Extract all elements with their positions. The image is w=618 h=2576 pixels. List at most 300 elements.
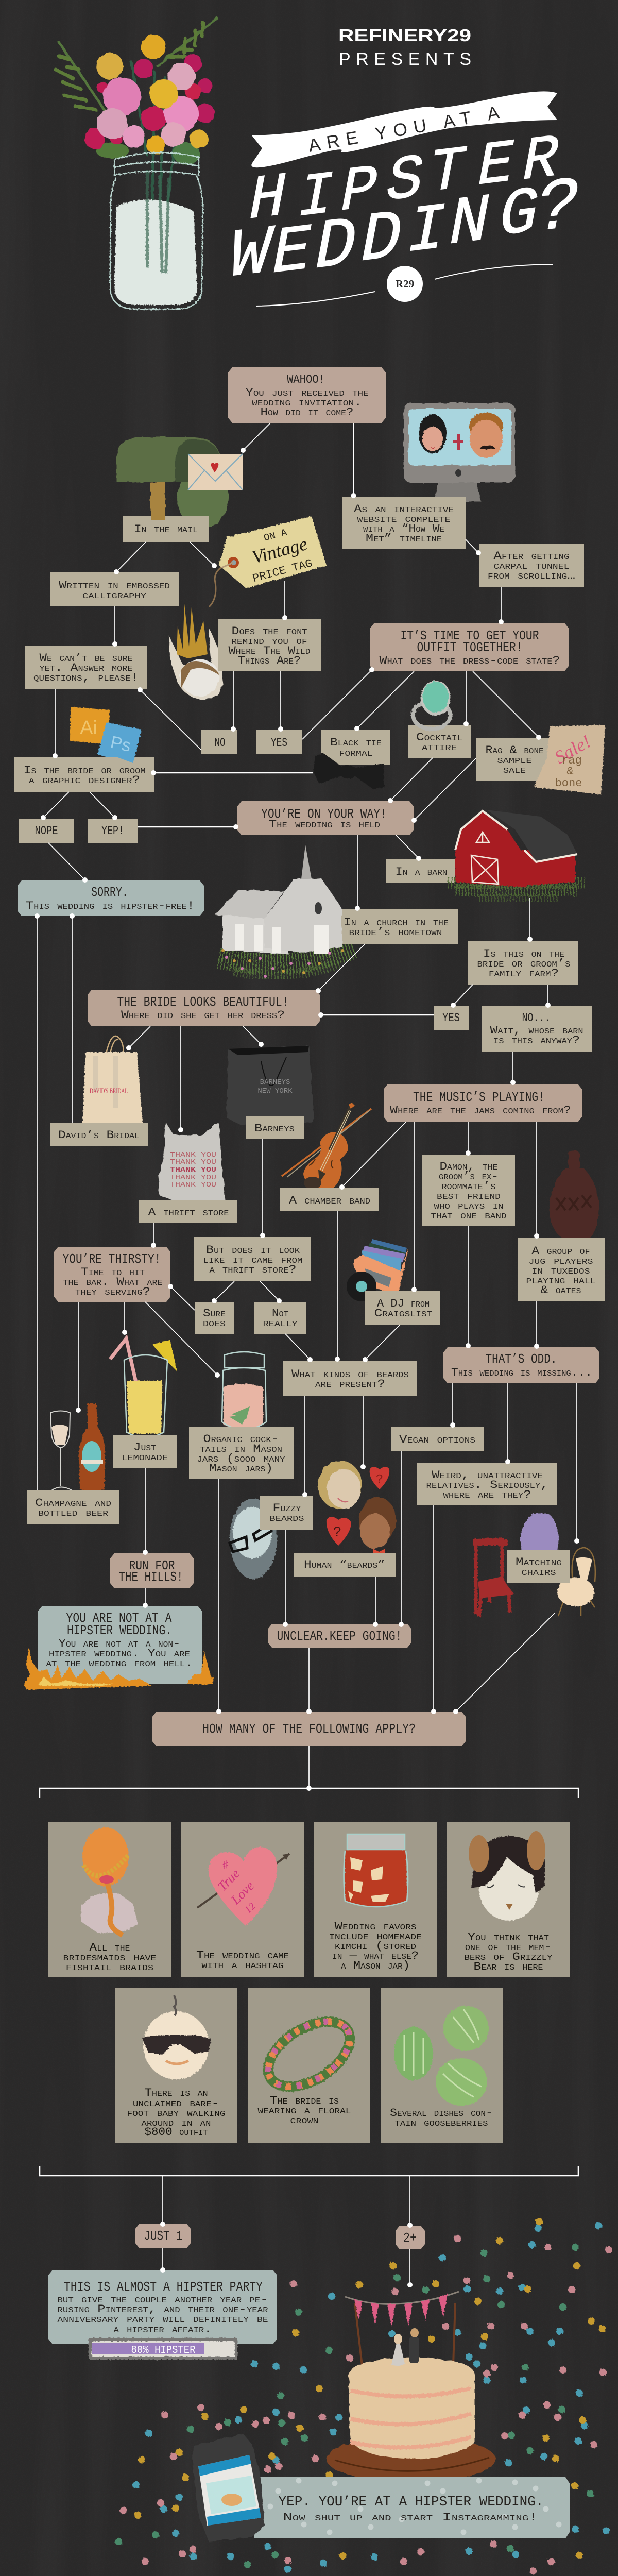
box: organic cocktails [189,1427,294,1479]
box: we can't be sure: yet. Answer more [39,662,133,674]
card: homemade kimchi: include homemade [329,1930,422,1943]
card: fishtail braids: fishtail braids [66,1961,153,1974]
icon: vintage price tag: ON A [263,527,288,544]
box: just 1 [135,2224,191,2248]
brand: refinery29 presents: REFINERY29 [338,26,471,45]
box: how many of the following apply [152,1712,466,1746]
arrow: rag and bone to on your way [411,758,476,823]
box: damon: that one band [431,1209,507,1222]
arrow: designer to yep [90,792,117,820]
box: after getting carpal tunnel: After getting [493,550,570,563]
arrow: human to unclear [373,1577,378,1627]
card: grizzly bear [447,1822,570,1977]
box: organic cocktails: jars (sooo many [197,1452,285,1465]
title: wedding: ? [536,165,579,252]
arrow: barneys to thrift question [260,1139,265,1238]
box: the music's playing: THE MUSIC’S PLAYING! [413,1090,545,1105]
box: just 1: JUST 1 [144,2228,182,2244]
card: homemade kimchi: kimchi (stored [335,1940,416,1953]
icon: barneys shopping bag [227,1046,313,1125]
box: rag and bone sample sale [476,738,550,781]
title: hipster [249,124,558,236]
box: fuzzy beards: Fuzzy [273,1502,301,1515]
arrow: written to not sure [112,606,117,647]
box: damon [422,1155,515,1226]
arrow: outfit to rag and bone [473,671,541,740]
icon: fuzzy beard hipster face [230,1499,277,1579]
icon: rag and bone sale sign: rag [561,754,582,767]
box: the music's playing: Where are the jams coming from? [390,1104,571,1117]
box: a group of jug players: in tuxedos [531,1264,590,1277]
box: unclear keep going [268,1624,411,1648]
box: in a barn [386,859,455,883]
box: just lemonade: Just [133,1441,156,1454]
icon: human beards faces and hearts [318,1461,396,1557]
arrow: in the mail to written [114,542,146,574]
title: hipster: E [478,129,514,202]
icon: human beards faces and hearts: ? [333,1525,341,1541]
illustration: heart with arrow: # [220,1857,231,1872]
arrow: yes to bride [318,1012,434,1018]
box: organic cocktails: Organic cock- [203,1433,279,1446]
card: homemade kimchi: in — what else? [332,1950,419,1962]
card: floral crown: The bride is [270,2094,339,2107]
card: barefoot baby: around in an [141,2116,211,2129]
arrow: bracket to just 1 [160,2176,165,2227]
arrow: unclear to how many [306,1648,312,1714]
arrow: jug players to odd [534,1301,539,1349]
box: you're on your way: YOU’RE ON YOUR WAY! [261,806,387,822]
box: black tie formal [321,730,390,765]
box: you are not at a hipster wedding: HIPSTER WEDDING. [67,1623,172,1638]
card: barefoot baby: unclaimed bare- [133,2097,219,2110]
arrow: family farm to no [545,985,551,1008]
icon: champagne flute [50,1411,72,1490]
box: you are not at a hipster wedding: You are not at a non- [59,1637,180,1650]
box: what kinds of beards: What kinds of beards [291,1368,409,1381]
card: grizzly bear: Bear is here [474,1960,543,1973]
arrow: church to bride [316,944,365,993]
box: weird unattractive relatives: relatives. Seriously, [426,1479,548,1492]
title banner: are you at a [251,91,557,167]
box: in a church: bride’s hometown [349,926,442,939]
box: a group of jug players: jug players [528,1255,593,1267]
arrow: vegan to unclear [399,1451,404,1627]
box: we can't be sure: We can’t be sure [39,652,133,665]
box: black tie formal: formal [339,747,373,759]
box: barneys: Barneys [254,1122,295,1135]
arrow: outfit to cocktail [464,671,469,726]
box: is the bride or groom a graphic designer: Is the bride or groom [24,764,145,777]
box: yes family farm: YES [442,1011,460,1025]
box: but does it look like a thrift store: like it came from [203,1253,303,1266]
box: a dj from craigslist [365,1291,440,1325]
box: fuzzy beards: beards [270,1512,304,1524]
box: sorry: This wedding is hipster-free! [26,900,195,912]
box: no whose barn: Wait, whose barn [490,1024,583,1037]
box: interactive website [342,497,466,549]
box: written in embossed calligraphy [50,572,179,606]
box: written in embossed calligraphy: Written in embossed [59,579,170,592]
card: floral crown: wearing a floral [258,2104,351,2117]
box: almost a hipster party [48,2270,277,2344]
icon: white church [215,845,355,976]
box: human beards: Human “beards” [304,1558,385,1571]
box: does the font: remind you of [232,635,307,648]
illustration: heart with arrow: Love [228,1878,257,1908]
box: damon: groom’s ex- [439,1170,499,1183]
icon: david's bridal shopping bag [82,1036,143,1126]
box: but does it look like a thrift store [194,1237,311,1281]
box: not really: Not [272,1307,288,1320]
box: the bride looks beautiful: THE BRIDE LOOKS BEAUTIFUL! [117,994,288,1010]
box: is this on the family farm [468,941,578,985]
illustration: kimchi jar [344,1834,408,1907]
arrow: beards to human [360,1396,366,1469]
icon: rag and bone sale sign: & [566,765,574,778]
card: fishtail braids: bridesmaids have [63,1951,157,1964]
box: you're on your way [237,801,414,835]
icon: illustrator and photoshop app icons: Ai [80,717,97,739]
card: hashtag: The wedding came [196,1949,289,1962]
icon: thank you plastic bag: THANK YOU [170,1151,216,1159]
icon: illustrator and photoshop app icons [70,707,142,763]
arrow: tag to font [282,581,287,620]
box: fuzzy beards [260,1496,313,1530]
box: but does it look like a thrift store: a thrift store? [209,1263,297,1276]
box: rag and bone sample sale: sample [497,754,531,767]
icon: rag and bone sale sign: Sale! [551,731,594,768]
box: is this on the family farm: Is this on the [483,947,564,960]
icon: phone with instagram [192,2434,265,2541]
box: almost a hipster party: but give the couple another year pe- [58,2293,268,2306]
illustration: heart with arrow: 12 [243,1901,258,1916]
box: sorry [18,880,204,916]
box: yep you're at a hipster wedding: YEP. YOU’RE AT A HIPSTER WEDDING. [278,2495,544,2510]
box: you're thirsty: the bar. What are [63,1276,163,1289]
arrow: sorry to champagne [35,913,40,1490]
box: almost a hipster party: THIS IS ALMOST A HIPSTER PARTY [64,2279,263,2295]
box: almost a hipster party: rusing Pinterest, and their one-year [58,2303,268,2316]
icon: illustrator and photoshop app icons: Ps [109,733,133,756]
card: floral crown [248,1988,370,2143]
arrow: yes to outfit [302,667,374,739]
box: in a barn: In a barn [396,866,447,878]
card: gooseberries: tain gooseberries [394,2116,488,2129]
arrow: nope to sorry [48,843,88,883]
box: unclear keep going: UNCLEAR.KEEP GOING! [277,1629,402,1644]
box: matching chairs: Matching [516,1556,562,1569]
box: time to get your outfit together: What does the dress-code state? [379,654,560,667]
icon: beer bottle [79,1403,105,1492]
icon: lemonade glass with straw [110,1338,177,1437]
arrow: lemonade to run [143,1468,148,1555]
box: what kinds of beards [283,1361,417,1396]
card: hashtag: with a hashtag [202,1959,283,1972]
arrow: family farm to yes [451,985,473,1008]
meter: 80% hipster [89,2338,237,2360]
card: fishtail braids: All the [90,1941,130,1954]
box: in the mail [123,516,209,542]
box: in a church: In a church in the [344,916,449,929]
box: nope: NOPE [35,824,58,838]
box: does the font: Does the font [232,625,307,638]
post of mailbox [151,515,165,520]
icon: emerald ring [413,681,451,729]
arrow: chairs to how many [453,1613,555,1714]
card: grizzly bear: bers of Grizzly [465,1951,552,1963]
box: is this on the family farm: family farm? [489,967,559,980]
box: a thrift store: A thrift store [148,1206,229,1219]
arrow: cocktail to on your way [388,758,433,803]
box: a group of jug players [518,1238,605,1301]
arrow: sure to thirsty [168,1284,195,1310]
illustration: bridesmaid with braid [81,1827,138,1935]
card: barefoot baby: foot baby walking [127,2107,226,2120]
bracket: above cards [40,1788,578,1798]
arrow: bracket to 2+ [407,2176,413,2228]
arrow: beards to fuzzy [302,1396,307,1497]
box: a group of jug players: A group of [531,1245,590,1258]
arrow: music to dj [411,1122,417,1292]
box: no: NO [214,736,226,750]
icon: vintage price tag [209,516,327,607]
card: grizzly bear: one of the mem- [465,1941,552,1954]
box: interactive website: As an interactive [354,503,454,516]
box: weird unattractive relatives [417,1463,557,1505]
icon: rag and bone sale sign [534,725,605,794]
title: hipster: S [387,144,423,218]
box: just lemonade: lemonade [122,1451,168,1464]
brand: refinery29 presents [338,26,471,69]
arrow: wahoo to mailbox [241,423,270,453]
box: wahoo: You just received the [245,386,369,399]
card: barefoot baby: $800 outfit [144,2126,208,2139]
box: vegan options [391,1427,484,1451]
box: you're thirsty: YOU’RE THIRSTY! [63,1251,161,1267]
box: cocktail attire: Cocktail [416,731,462,744]
card: hashtag [181,1822,304,1977]
arrow: bride to barneys [243,1026,264,1047]
icon: mason jar cocktail [222,1352,266,1430]
icon: thank you plastic bag: THANK YOU [170,1158,216,1166]
arrow: organic to how many [216,1479,221,1714]
arrow: music to jug players [534,1122,539,1239]
arrow: wahoo to website [351,423,356,498]
box: yep [88,819,138,843]
arrow: thirsty to mason jar [145,1302,220,1378]
icon: violin and bow [282,1103,371,1191]
icon: flames [24,1648,214,1690]
box: yep you're at a hipster wedding: Now shut up and start Instagramming! [283,2511,538,2524]
arrow: bride to thrift bag [178,1026,183,1132]
box: that's odd: THAT’S ODD. [485,1351,557,1367]
box: is the bride or groom a graphic designer [14,757,154,792]
box: what kinds of beards: are present? [315,1378,385,1391]
arrow: run to not hipster [143,1588,148,1608]
arrow: website to after [466,539,481,555]
box: damon: roommate’s [442,1180,495,1193]
card: fishtail braids [48,1822,171,1977]
icon: wild thing with crown [169,604,223,700]
arrow: after to outfit [499,587,504,624]
arrow: odd to chairs [574,1383,579,1544]
box: you're thirsty: they serving? [75,1285,150,1298]
illustration: heart with arrow: True [215,1866,243,1894]
card: homemade kimchi [314,1822,437,1977]
illustration: floral crown [257,2008,361,2100]
arrow: not sure to designer [53,689,58,758]
box: weird unattractive relatives: where are they? [443,1488,531,1501]
card: barefoot baby [115,1988,237,2143]
box: yep: YEP! [101,824,124,838]
box: time to get your outfit together: OUTFIT TOGETHER! [417,640,522,655]
box: the music's playing [384,1084,582,1122]
card: gooseberries: Several dishes con- [390,2107,493,2120]
box: rag and bone sample sale: sale [503,764,526,776]
arrow: in the mail to tag [190,542,217,568]
box: in a church [340,909,458,944]
brand: refinery29 presents: PRESENTS [339,49,471,69]
box: organic cocktails: tails in Mason [200,1443,282,1455]
arrow: thirsty to beer [76,1302,81,1413]
box: no [201,730,237,754]
icon: black bow tie [313,753,384,789]
box: interactive website: website complete [357,513,450,526]
arrow: sorry to david's bridal [70,913,75,1123]
box: wahoo: How did it come? [261,406,353,419]
meter: 80% hipster: 80% HIPSTER [131,2345,196,2357]
arrow: yep to on your way [138,824,238,829]
arrow: on your way to church [355,835,360,911]
box: time to get your outfit together [370,623,569,671]
box: a chamber band [280,1188,379,1211]
box: not really [254,1302,306,1334]
box: but does it look like a thrift store: But does it look [206,1244,300,1257]
arrow: font to yes [278,671,283,732]
box: 2+: 2+ [403,2230,417,2246]
title: hipster: P [341,154,377,228]
box: cocktail attire: attire [422,741,457,754]
arrow: outfit to black tie [354,671,414,731]
box: interactive website: with a “How We [363,522,444,535]
box: david's bridal [50,1123,148,1146]
box: vegan options: Vegan options [399,1433,475,1446]
box: does the font [218,619,321,671]
box: champagne and bottled beer [27,1490,119,1524]
r29 badge and title flourish [256,264,553,306]
box: after getting carpal tunnel: carpal tunnel [493,560,570,572]
card: grizzly bear: You think that [468,1931,549,1944]
box: that's odd: This wedding is missing... [451,1366,592,1379]
box: almost a hipster party: a hipster affair. [113,2323,212,2336]
box: in the mail: In the mail [134,523,198,536]
box: nope [19,819,74,843]
title: wedding [230,165,579,296]
arrow: not really to beards [285,1334,313,1362]
icon: wedding cake with bunting [327,2292,495,2482]
arrow: dj to beards [363,1325,400,1362]
r29 badge and title flourish: R29 [396,278,414,290]
box: how many of the following apply: HOW MANY OF THE FOLLOWING APPLY? [202,1721,416,1737]
title: wedding: G [500,176,538,254]
box: wahoo: wedding invitation. [252,396,362,409]
icon: mailbox with envelope [116,437,243,528]
box: we can't be sure [25,646,147,689]
box: sure does: Sure [203,1307,226,1320]
box: damon: Damon, the [440,1160,497,1173]
icon: mismatched chairs [473,1513,595,1617]
box: champagne and bottled beer: bottled beer [38,1506,108,1519]
box: no whose barn [482,1006,592,1052]
icon: xxx jug [549,1151,599,1243]
box: yes family farm [434,1006,469,1030]
title: wedding: W [230,214,276,296]
arrow: designer to bow tie [151,770,313,775]
box: sure does: does [203,1317,226,1330]
illustration: heart with arrow [197,1847,289,1926]
arrow: not sure to no [138,687,201,750]
arrow: damon to odd [466,1226,471,1348]
title: wedding: I [407,192,445,270]
icon: barneys shopping bag: BARNEYS [260,1078,290,1087]
arrow: thrift question to sure [212,1281,234,1303]
box: damon: who plays in [434,1199,504,1212]
box: is the bride or groom a graphic designer: a graphic designer? [29,774,140,787]
box: a dj from craigslist: Craigslist [374,1307,433,1320]
arrow: font to no [231,671,236,732]
box: no whose barn: NO... [522,1011,550,1025]
box: sure does [195,1302,234,1334]
box: almost a hipster party: anniversary party will definitely be [58,2313,268,2326]
arrow: music to damon [466,1122,471,1156]
box: just lemonade [113,1435,177,1468]
pale confetti over box [270,2481,559,2532]
box: does the font: Things Are? [238,654,301,667]
illustration: gooseberries [394,2006,489,2106]
box: is this on the family farm: bride or groom’s [477,957,571,970]
card: floral crown: crown [290,2114,318,2127]
icon: vintage price tag: Vintage [250,533,310,568]
box: weird unattractive relatives: Weird, unattractive [432,1469,543,1482]
icon: barneys shopping bag: NEW YORK [258,1087,293,1095]
icon: rag and bone sale sign: bone [555,777,582,790]
arrow: thrift question to not really [260,1281,282,1303]
arrow: thirsty to lemonade [122,1302,127,1335]
box: not really: really [263,1317,298,1330]
arrow: 2+ to cake [407,2249,413,2287]
illustration: bear-eared band member [469,1831,545,1921]
title: wedding: N [450,183,489,263]
icon: red barn [448,810,585,899]
box: a thrift store [139,1200,237,1223]
arrow: just 1 to almost [160,2248,165,2273]
box: we can't be sure: questions, please! [33,671,139,684]
box: cocktail attire [408,725,471,758]
box: the bride looks beautiful [88,990,320,1026]
card: gooseberries [381,1988,503,2143]
icon: thank you plastic bag: THANK YOU [170,1181,216,1189]
box: sorry: SORRY. [91,885,128,900]
icon: human beards faces and hearts: ? [376,1473,383,1487]
title: wedding: D [361,198,402,281]
arrow: bride to david's bag [126,1026,150,1050]
box: matching chairs: chairs [521,1566,556,1579]
box: you are not at a hipster wedding: hipster wedding. You are [49,1647,190,1660]
title banner: are you at a: ARE YOU AT A [307,103,501,156]
arrow: fuzzy to unclear [283,1530,288,1627]
box: a group of jug players: playing hall [526,1274,595,1287]
